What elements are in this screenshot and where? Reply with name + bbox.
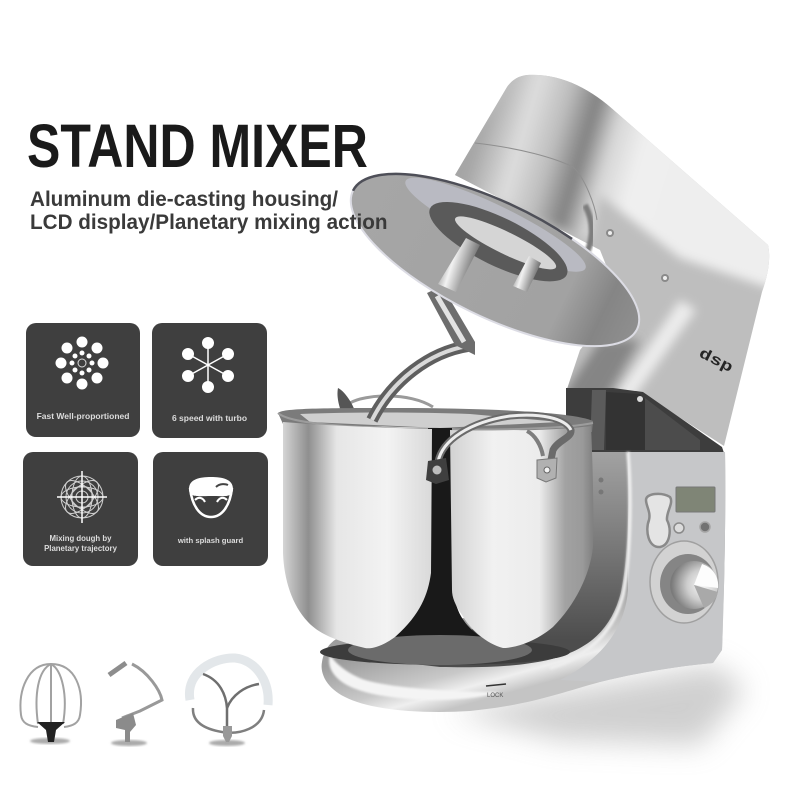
wire whisk attachment bbox=[20, 664, 81, 744]
lock label: LOCK bbox=[487, 693, 503, 699]
label: with splash guard bbox=[178, 536, 243, 545]
label: Planetary trajectory bbox=[44, 544, 117, 552]
dough hook attached bbox=[372, 286, 475, 420]
plate ring under bowl bbox=[320, 639, 570, 665]
beater parts behind bowl rim bbox=[337, 388, 433, 422]
lever bbox=[646, 494, 671, 547]
label: Mixing dough by bbox=[50, 534, 111, 543]
subtitle bbox=[30, 188, 387, 234]
mixing bowl bbox=[278, 408, 593, 665]
panel: planetary trajectory bbox=[23, 452, 138, 566]
panel: splash guard bbox=[153, 452, 268, 566]
label bbox=[44, 534, 117, 552]
flat beater attachment bbox=[189, 658, 268, 746]
mixer arm and head bbox=[455, 74, 770, 446]
panel: 6 speed with turbo bbox=[152, 323, 267, 438]
bowl centre dark reflection bbox=[365, 428, 505, 648]
lift hinge bbox=[566, 388, 724, 453]
plate under bowl bbox=[348, 635, 532, 665]
right lobe bbox=[450, 426, 593, 648]
logo: dsp bbox=[696, 345, 736, 377]
icon: six-speed node star bbox=[182, 337, 234, 393]
floor shadow bbox=[450, 665, 745, 745]
dial bbox=[650, 541, 718, 623]
control panel bbox=[646, 487, 718, 623]
bowl handle bbox=[438, 415, 571, 470]
left lobe bbox=[283, 422, 432, 648]
label: 6 speed with turbo bbox=[172, 413, 247, 423]
panel: fast well-proportioned bbox=[26, 323, 140, 437]
stand mixer product illustration bbox=[19, 74, 770, 756]
label: Fast Well-proportioned bbox=[37, 411, 129, 421]
bowl interior and rim bbox=[278, 408, 593, 432]
icon: bowl with splash guard bbox=[188, 477, 234, 518]
subtitle: LCD display/Planetary mixing action bbox=[30, 211, 387, 234]
icon: planetary orbit bbox=[57, 471, 107, 523]
icon: dots ring bbox=[56, 336, 108, 390]
subtitle: Aluminum die-casting housing/ bbox=[30, 188, 338, 211]
transparent splash guard bbox=[328, 140, 662, 380]
title: STAND MIXER bbox=[27, 112, 368, 180]
mixer shafts bbox=[438, 238, 480, 292]
lcd display bbox=[676, 487, 715, 512]
handle brackets bbox=[426, 458, 449, 484]
mixer body and base bbox=[322, 452, 725, 712]
dough hook attachment bbox=[109, 663, 162, 746]
